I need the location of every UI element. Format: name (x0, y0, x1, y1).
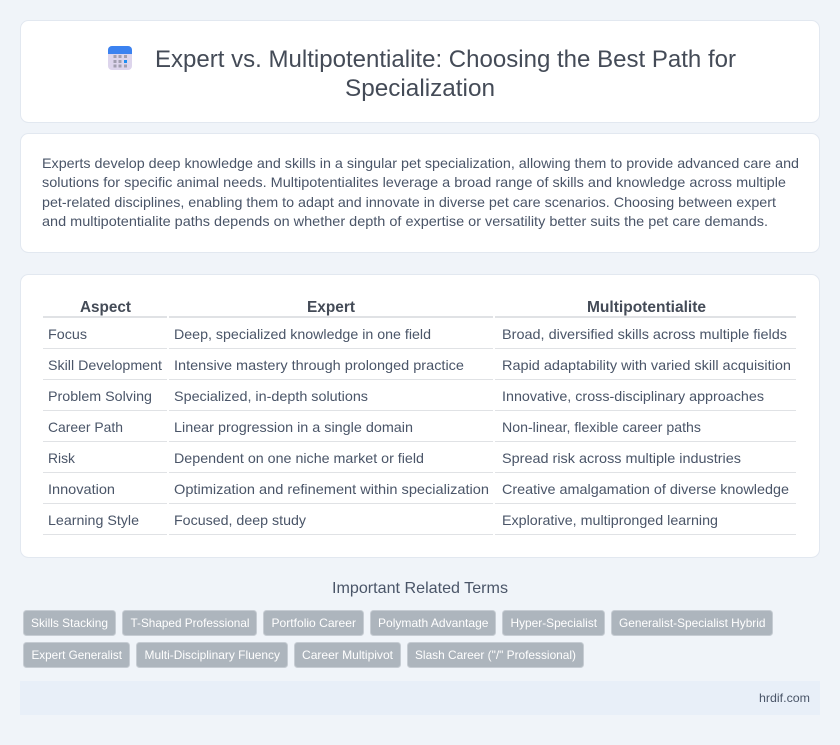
tag: T-Shaped Professional (122, 610, 256, 636)
heading: page title: Expert vs. Multipotentialite: Choosing the Best Path for (155, 46, 736, 73)
panel: comparison table (20, 274, 820, 558)
table row: Skill Development (43, 357, 796, 380)
tag: Portfolio Career: Portfolio Career (272, 616, 356, 630)
tag: Generalist-Specialist Hybrid (612, 610, 772, 636)
tag: Polymath Advantage: Polymath Advantage (378, 616, 489, 630)
text block: introduction paragraph: Experts develop deep knowledge and skills in a singular pet specialization, allowing them to provide advanced care and (42, 155, 799, 171)
table header (43, 299, 796, 318)
table row: Skill Development: Skill Development (48, 357, 162, 373)
table row: Problem Solving: Specialized, in-depth solutions (174, 388, 368, 404)
tag: Skills Stacking: Skills Stacking (31, 616, 108, 630)
tag: Multi-Disciplinary Fluency (136, 642, 288, 668)
table row: Risk: Dependent on one niche market or field (174, 450, 424, 466)
table row: Innovation: Optimization and refinement within specialization (174, 481, 489, 497)
text block: introduction paragraph (42, 155, 799, 229)
footer: hrdif.com (759, 691, 810, 705)
tag: T-Shaped Professional: T-Shaped Professional (130, 616, 250, 630)
table row: Innovation: Innovation (48, 481, 115, 497)
tag: Hyper-Specialist (502, 610, 604, 636)
table row: Focus: Deep, specialized knowledge in one field (174, 326, 431, 342)
table row: Career Path: Career Path (48, 419, 123, 435)
heading: page title (155, 46, 736, 102)
table row: Career Path (43, 419, 796, 442)
table header: Multipotentialite (587, 299, 706, 316)
table row: Problem Solving (43, 388, 796, 411)
tag: Generalist-Specialist Hybrid: Generalist-Specialist Hybrid (619, 616, 766, 630)
table row: Risk: Spread risk across multiple industries (502, 450, 741, 466)
tag: Slash Career: Slash Career ("/" Professional) (415, 648, 576, 662)
table row: Problem Solving: Innovative, cross-disciplinary approaches (502, 388, 764, 404)
table header: Expert (307, 299, 356, 316)
table row: Innovation: Creative amalgamation of diverse knowledge (502, 481, 789, 497)
table header: Aspect (80, 299, 132, 316)
table row: Career Path: Non-linear, flexible career paths (502, 419, 701, 435)
table row: Learning Style: Learning Style (48, 512, 139, 528)
table row: Skill Development: Intensive mastery through prolonged practice (174, 357, 464, 373)
footer (20, 681, 820, 715)
tag: Multi-Disciplinary Fluency: Multi-Disciplinary Fluency (144, 648, 280, 662)
panel: title header (20, 20, 820, 122)
table row: Focus (43, 326, 796, 349)
table row: Focus: Broad, diversified skills across multiple fields (502, 326, 787, 342)
tag: Skills Stacking (24, 610, 116, 636)
table row: Learning Style: Focused, deep study (174, 512, 306, 528)
tag: Slash Career (408, 642, 584, 668)
table row: Risk (43, 450, 796, 473)
tag: Expert Generalist: Expert Generalist (32, 648, 123, 662)
text block: introduction paragraph: pet-related disciplines, enabling them to adapt and innovate in diverse pet care scenarios. Choosing between expert (42, 194, 776, 210)
icon: calendar (108, 46, 132, 70)
heading: related terms: Important Related Terms (332, 580, 508, 597)
heading: page title: Specialization (345, 75, 495, 102)
table row: Innovation (43, 481, 796, 504)
text block: introduction paragraph: and multipotentialite paths depends on whether depth of expertise or versatility better suits the pet care demands. (42, 213, 768, 229)
tag: Portfolio Career (264, 610, 364, 636)
table row: Learning Style: Explorative, multipronged learning (502, 512, 718, 528)
panel: introduction (20, 134, 820, 252)
table row: Problem Solving: Problem Solving (48, 388, 152, 404)
tag: Career Multipivot (294, 642, 400, 668)
table row: Learning Style (43, 512, 796, 535)
table row: Career Path: Linear progression in a single domain (174, 419, 413, 435)
tag: Expert Generalist (24, 642, 130, 668)
tag: Hyper-Specialist: Hyper-Specialist (510, 616, 598, 630)
tag: Polymath Advantage (370, 610, 496, 636)
table row: Skill Development: Rapid adaptability with varied skill acquisition (502, 357, 791, 373)
tag: Career Multipivot: Career Multipivot (302, 648, 394, 662)
table row: Focus: Focus (48, 326, 87, 342)
table row: Risk: Risk (48, 450, 76, 466)
text block: introduction paragraph: solutions for specific animal needs. Multipotentialites leverage a broad range of skills and knowledge across multiple (42, 174, 786, 190)
tag list: related terms (24, 610, 772, 668)
